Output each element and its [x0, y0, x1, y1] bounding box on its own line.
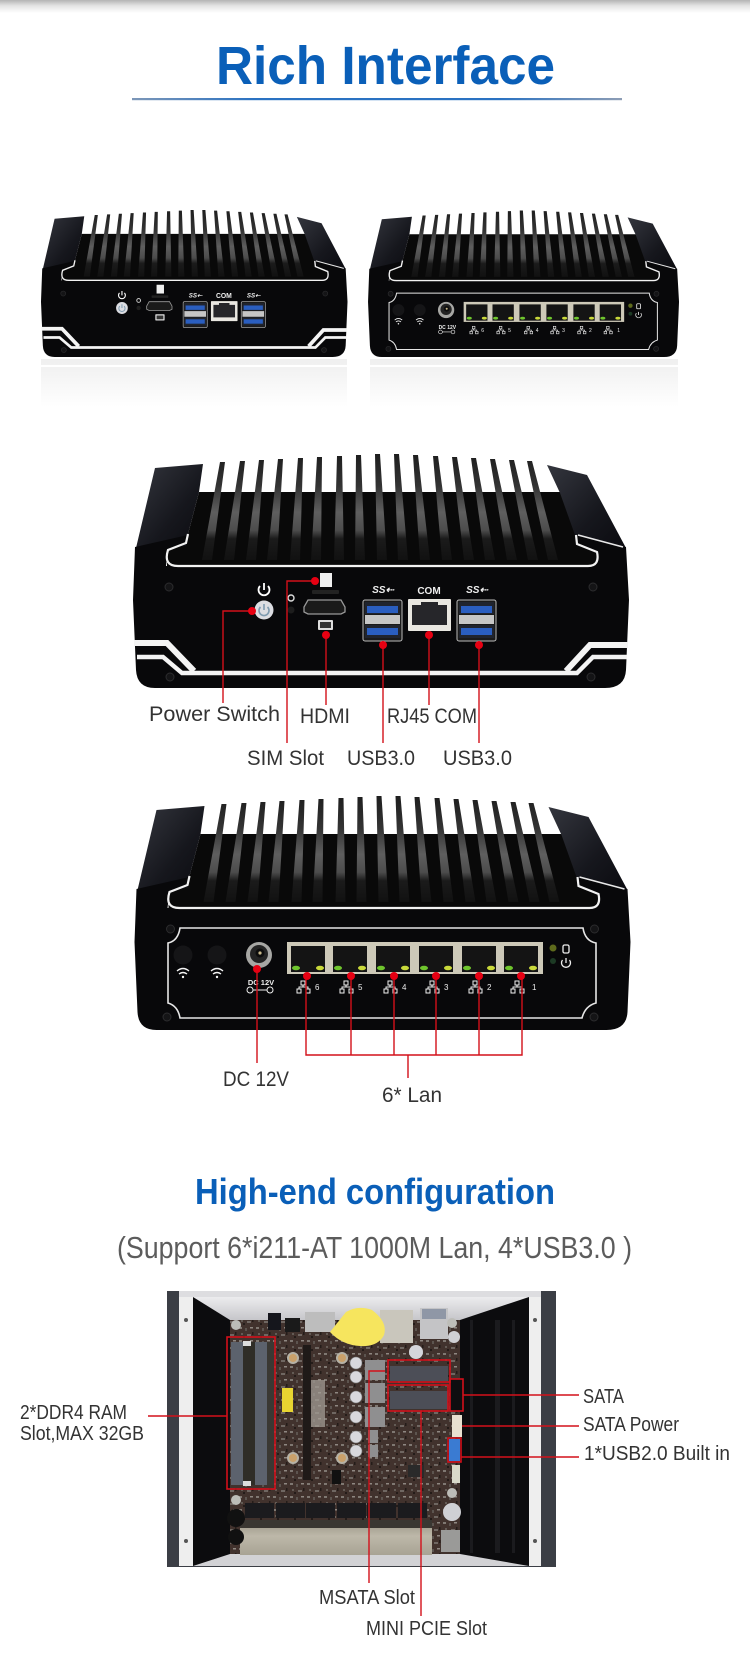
- device photo: front view, small: SS⇠: [189, 292, 203, 299]
- title underline: [132, 98, 622, 100]
- device photo: front view, small: [41, 210, 348, 357]
- callout: RAM slots: Slot,MAX 32GB: [20, 1423, 144, 1445]
- device photo: front view, large: SS⇠: [466, 585, 488, 596]
- callout: HDMI: [300, 631, 350, 728]
- yellow battery: [330, 1308, 385, 1346]
- RAM slots: [231, 1341, 274, 1486]
- callout: MINI PCIE slot: MINI PCIE Slot: [366, 1618, 487, 1640]
- title: Rich Interface: Rich Interface: [216, 36, 555, 96]
- reflection under top-right device: [370, 359, 678, 407]
- device photo: rear view, small: 3: [562, 328, 565, 334]
- callout: 6 LAN ports: 6* Lan: [382, 1084, 442, 1107]
- callout: SATA: SATA: [583, 1386, 625, 1408]
- callout: DC 12V: DC 12V: [223, 1068, 289, 1091]
- annotated device: rear ports: [134, 796, 630, 1107]
- device photo: front view, large: COM: [417, 586, 441, 597]
- callout: DC 12V: [223, 965, 289, 1091]
- device photo: front view, small: COM: [216, 293, 232, 300]
- callout: power switch: [149, 607, 280, 726]
- callout: USB3.0 right: USB3.0: [443, 747, 512, 770]
- device photo: rear view, small: 2: [589, 328, 592, 334]
- callout: USB2.0 built in: [448, 1438, 730, 1465]
- device photo: rear view, large: 1: [532, 983, 537, 992]
- slots: [390, 1366, 463, 1483]
- device photo: front view, large: SS⇠: [372, 585, 394, 596]
- rear connectors: [268, 1308, 448, 1343]
- circuit board: [230, 1320, 460, 1554]
- device photo: front view, large: [133, 454, 629, 688]
- callout: SIM slot: [247, 577, 324, 770]
- callout: SATA: [450, 1379, 625, 1411]
- callout: SIM slot: SIM Slot: [247, 747, 324, 770]
- heading: High-end configuration: High-end configuration: [195, 1171, 555, 1212]
- callout: MSATA slot: MSATA Slot: [319, 1587, 415, 1609]
- device photo: rear view, large: 4: [402, 983, 407, 992]
- LAN transformers and jack block: [227, 1318, 461, 1555]
- annotated device: front ports: [133, 454, 629, 770]
- callout: RJ45 COM: [387, 631, 477, 728]
- callout: RAM slots: 2*DDR4 RAM: [20, 1402, 127, 1424]
- callout: USB2.0 built in: 1*USB2.0 Built in: [584, 1443, 730, 1465]
- motherboard photo: [167, 1291, 556, 1567]
- capacitors and inductors: [282, 1345, 424, 1484]
- device photo: rear view, small: 1: [617, 328, 620, 334]
- callout: SATA Power: SATA Power: [583, 1414, 679, 1436]
- top shadow band: [0, 0, 750, 13]
- device photo: rear view, small: 6: [481, 328, 484, 334]
- callout: MINI PCIE slot: [366, 1385, 487, 1640]
- callout: RAM slots: [20, 1337, 275, 1489]
- callout: HDMI: HDMI: [300, 705, 350, 728]
- device photo: rear view, small: 5: [508, 328, 511, 334]
- callout: 6 LAN ports: [303, 972, 525, 1107]
- callout: RJ45 COM: RJ45 COM: [387, 705, 477, 728]
- callout: USB3.0 left: USB3.0: [347, 747, 415, 770]
- device photo: rear view, small: DC 12V: [439, 325, 457, 331]
- device photo: rear view, large: 6: [315, 983, 320, 992]
- reflection under top-left device: [41, 359, 347, 407]
- device photo: rear view, large: 5: [358, 983, 363, 992]
- callout: USB3.0 left: [347, 641, 415, 770]
- callout: MSATA slot: [319, 1360, 450, 1609]
- callout: USB3.0 right: [443, 641, 512, 770]
- subheading: (Support 6*i211-AT 1000M Lan, 4*USB3.0 ): [117, 1230, 632, 1265]
- device photo: rear view, large: 3: [444, 983, 449, 992]
- device photo: rear view, large: DC 12V: [248, 978, 274, 987]
- device photo: rear view, large: [134, 796, 630, 1030]
- device photo: front view, small: SS⇠: [247, 292, 261, 299]
- device photo: rear view, large: 2: [487, 983, 492, 992]
- callout: power switch: Power Switch: [149, 703, 280, 726]
- device photo: rear view, small: 4: [536, 328, 539, 334]
- device photo: rear view, small: [368, 210, 679, 357]
